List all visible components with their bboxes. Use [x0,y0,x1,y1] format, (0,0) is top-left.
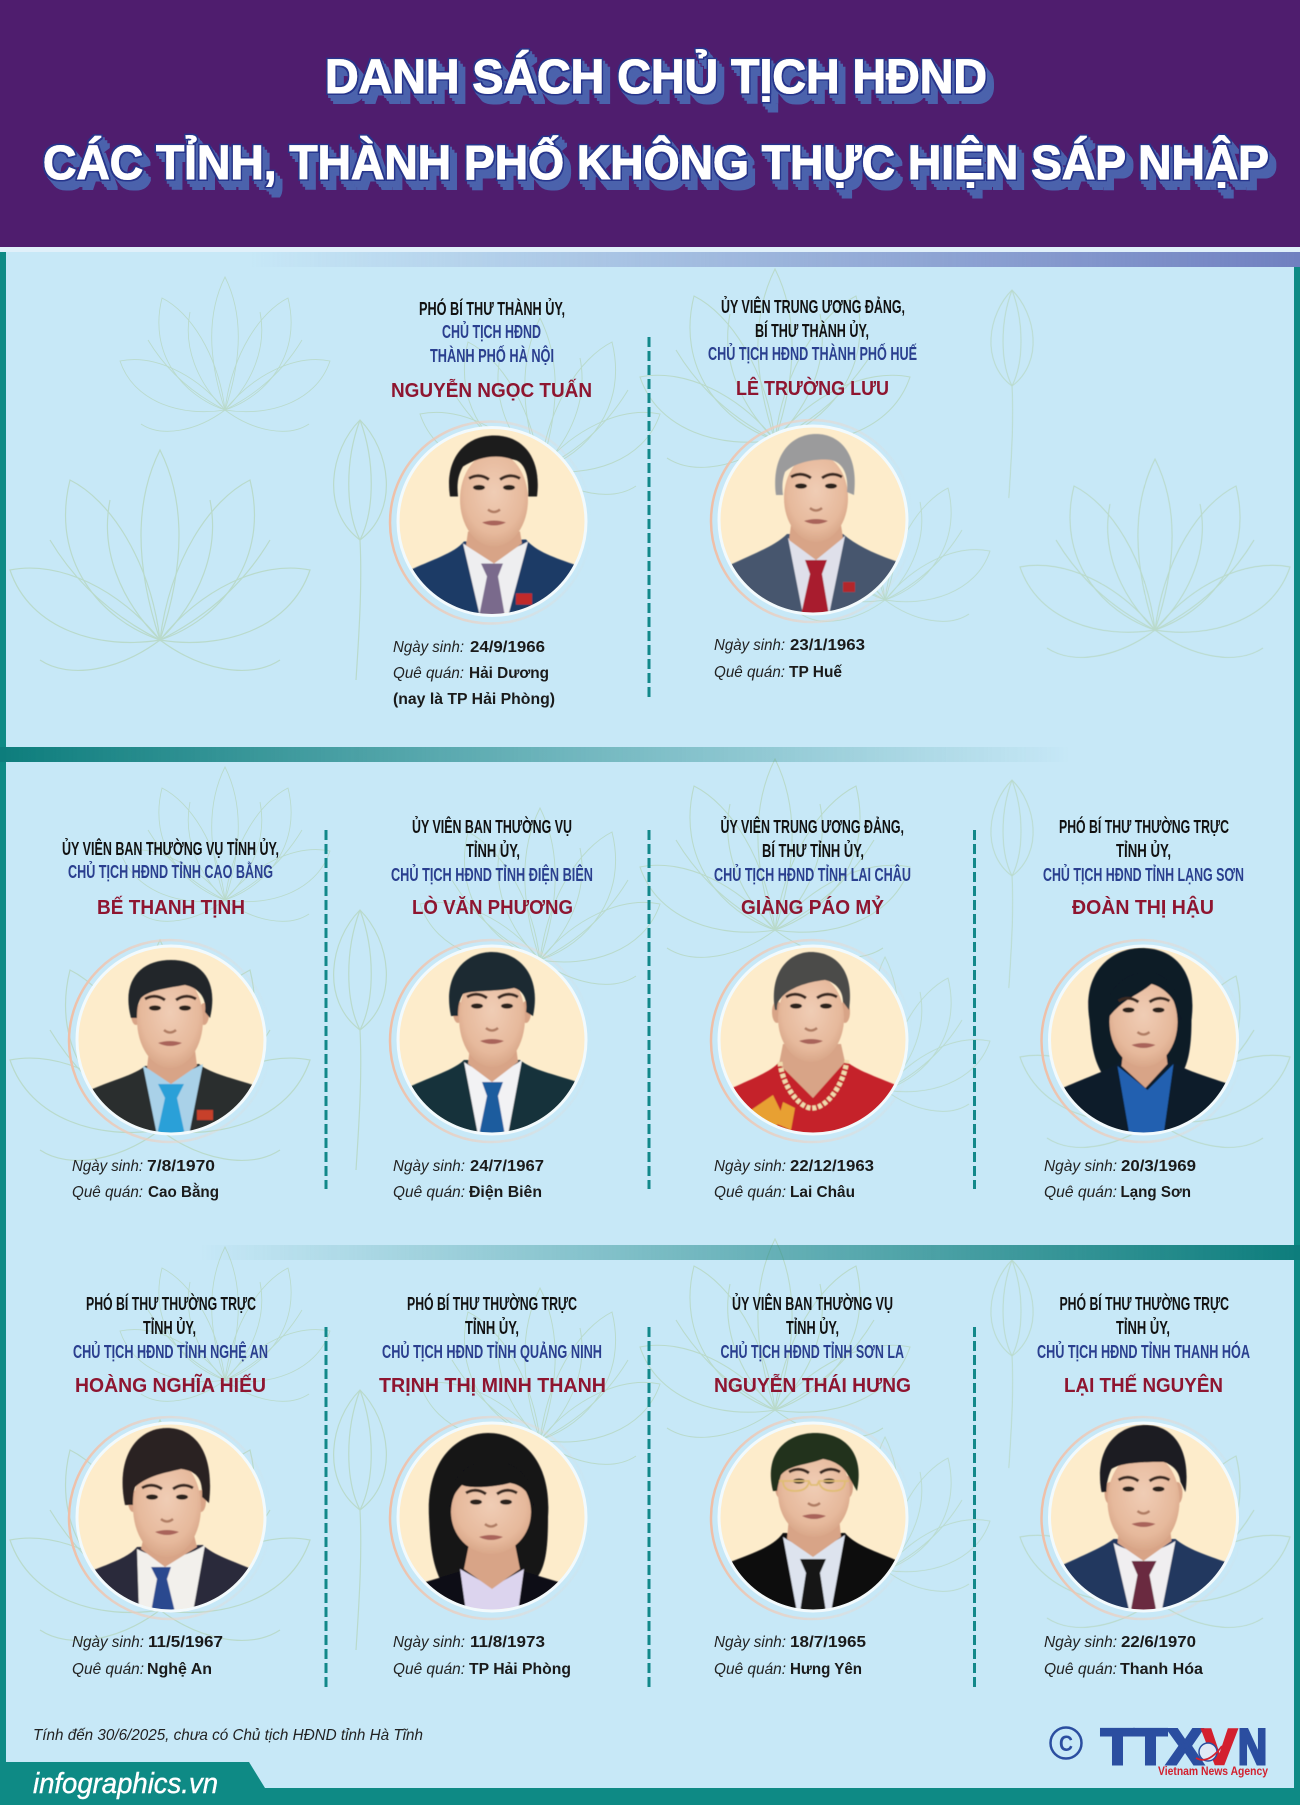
role text [62,838,279,882]
info: Ngày sinh: [72,1158,143,1175]
info: Ngày sinh: [72,1634,144,1651]
info: 11/8/1973 [470,1634,545,1651]
info: Cao Bằng [148,1182,219,1201]
info: 22/12/1963 [790,1158,874,1175]
info [1044,1158,1196,1201]
name: BẾ THANH TỊNH [97,896,245,919]
info: Ngày sinh: [714,1634,786,1651]
info: Quê quán: [393,665,464,682]
panel: Đoàn Thị Hậu [1042,816,1244,1201]
role text: BÍ THƯ THÀNH ỦY, [755,320,869,341]
footnote: Tính đến 30/6/2025, chưa có Chủ tịch HĐND tỉnh Hà Tĩnh [33,1727,423,1744]
panel: Nguyễn Thái Hưng [711,1293,913,1678]
info: 22/6/1970 [1121,1634,1196,1651]
site name: infographics.vn [33,1768,218,1800]
info: Ngày sinh: [393,1158,465,1175]
name: NGUYỄN THÁI HƯNG [714,1374,911,1397]
title: DANH SÁCH CHỦ TỊCH HĐND [325,49,987,104]
panel: Lê Trường Lưu [708,296,917,681]
name: NGUYỄN NGỌC TUẤN [391,379,592,402]
logo: TTXVN: N [1238,1719,1267,1775]
info: Quê quán: [1044,1184,1117,1201]
role text [720,1293,904,1362]
info: Quê quán: [393,1184,465,1201]
info [393,1158,544,1201]
info: Lai Châu [790,1184,855,1201]
info: Thanh Hóa [1120,1661,1203,1678]
role text: PHÓ BÍ THƯ THƯỜNG TRỰC [407,1293,577,1314]
role text: CHỦ TỊCH HĐND [442,321,541,342]
icon: copyright: C [1059,1731,1073,1756]
role text [391,816,593,885]
portrait [711,940,913,1142]
portrait [711,420,913,622]
role text [1037,1293,1250,1362]
portrait [1042,1417,1244,1619]
portrait [69,1417,271,1619]
info: TP Huế [789,664,842,681]
info [72,1634,223,1678]
info: Hải Dương [469,665,549,682]
role text [1043,816,1244,885]
role text: ỦY VIÊN TRUNG ƯƠNG ĐẢNG, [721,296,905,317]
name: LÊ TRƯỜNG LƯU [736,376,889,400]
role text: ỦY VIÊN BAN THƯỜNG VỤ TỈNH ỦY, [62,838,279,859]
panel: Nguyễn Ngọc Tuấn [390,298,592,708]
info: Quê quán: [714,1184,786,1201]
role text: TỈNH ỦY, [465,1317,519,1338]
role text: TỈNH ỦY, [1116,840,1171,861]
name: LÒ VĂN PHƯƠNG [412,895,573,919]
portrait [390,940,592,1142]
role text: TỈNH ỦY, [466,840,520,861]
info: Ngày sinh: [1044,1634,1117,1651]
info: 23/1/1963 [790,637,865,654]
portrait [711,1417,913,1619]
info: 24/9/1966 [470,639,545,656]
info: Ngày sinh: [393,639,464,656]
info [714,637,865,681]
role text: CHỦ TỊCH HĐND TỈNH CAO BẰNG [68,861,273,882]
portrait [69,940,271,1142]
role text: TỈNH ỦY, [1116,1317,1170,1338]
info: Quê quán: [72,1184,143,1201]
info: Quê quán: [714,1661,786,1678]
portrait [1042,940,1244,1142]
name: LẠI THẾ NGUYÊN [1064,1373,1223,1397]
footer bar [0,1762,1300,1805]
info: Ngày sinh: [714,1158,786,1175]
role text [714,816,911,885]
role text: THÀNH PHỐ HÀ NỘI [430,345,554,366]
info: Quê quán: [714,664,785,681]
header banner [0,0,1300,252]
role text: CHỦ TỊCH HĐND TỈNH SƠN LA [720,1341,904,1362]
role text: ỦY VIÊN TRUNG ƯƠNG ĐẢNG, [720,816,904,837]
role text [382,1293,602,1362]
info: 24/7/1967 [470,1158,544,1175]
panel: Giàng Páo Mỷ [711,816,913,1201]
role text: ỦY VIÊN BAN THƯỜNG VỤ [412,816,572,837]
role text [73,1293,268,1362]
info: Quê quán: [1044,1661,1117,1678]
info [1044,1634,1203,1678]
info: Ngày sinh: [1044,1158,1117,1175]
info: Lạng Sơn [1120,1184,1191,1201]
info: Quê quán: [72,1661,144,1678]
role text [708,296,917,364]
role text: ỦY VIÊN BAN THƯỜNG VỤ [732,1293,893,1314]
info: 20/3/1969 [1121,1158,1196,1175]
role text: PHÓ BÍ THƯ THÀNH ỦY, [419,298,565,319]
info: Ngày sinh: [393,1634,465,1651]
role text [419,298,565,366]
title [43,49,1269,190]
logo: TTXVN: TTX [1101,1719,1203,1775]
role text: CHỦ TỊCH HĐND TỈNH QUẢNG NINH [382,1341,602,1362]
info: 11/5/1967 [148,1634,223,1651]
logo: TTXVN [1101,1719,1269,1778]
logo: TTXVN: Vietnam News Agency [1158,1766,1269,1778]
icon: copyright [1050,1728,1082,1758]
logo: TTXVN: V [1202,1719,1238,1775]
info [393,1634,571,1678]
role text: CHỦ TỊCH HĐND TỈNH NGHỆ AN [73,1341,268,1362]
info: (nay là TP Hải Phòng) [393,691,555,708]
info [714,1158,874,1201]
role text: TỈNH ỦY, [143,1317,196,1338]
name: TRỊNH THỊ MINH THANH [379,1375,606,1397]
portrait [390,1417,592,1619]
info: TP Hải Phòng [469,1661,571,1678]
info: Quê quán: [393,1661,465,1678]
info [72,1158,219,1201]
info: Ngày sinh: [714,637,785,654]
info: 18/7/1965 [790,1634,866,1651]
info: Hưng Yên [790,1661,862,1678]
role text: TỈNH ỦY, [786,1317,839,1338]
panel: Lò Văn Phương [390,816,593,1201]
info: Nghệ An [147,1661,212,1678]
name: GIÀNG PÁO MỶ [741,896,885,919]
panel: Lại Thế Nguyên [1037,1293,1250,1678]
role text: PHÓ BÍ THƯ THƯỜNG TRỰC [86,1293,256,1314]
portrait [390,422,592,624]
role text: CHỦ TỊCH HĐND TỈNH ĐIỆN BIÊN [391,864,593,885]
role text: CHỦ TỊCH HĐND TỈNH LAI CHÂU [714,864,911,885]
info: Điện Biên [469,1184,542,1201]
info [714,1634,866,1678]
role text: CHỦ TỊCH HĐND THÀNH PHỐ HUẾ [708,343,917,364]
panel: Trịnh Thị Minh Thanh [379,1293,606,1678]
panel: Bế Thanh Tịnh [62,838,279,1201]
panel: Hoàng Nghĩa Hiếu [69,1293,271,1678]
role text: BÍ THƯ TỈNH ỦY, [762,840,864,861]
title: CÁC TỈNH, THÀNH PHỐ KHÔNG THỰC HIỆN SÁP NHẬP [43,135,1269,190]
name: HOÀNG NGHĨA HIẾU [75,1374,266,1397]
name: ĐOÀN THỊ HẬU [1072,895,1214,919]
info [393,639,555,708]
info: 7/8/1970 [147,1158,215,1175]
